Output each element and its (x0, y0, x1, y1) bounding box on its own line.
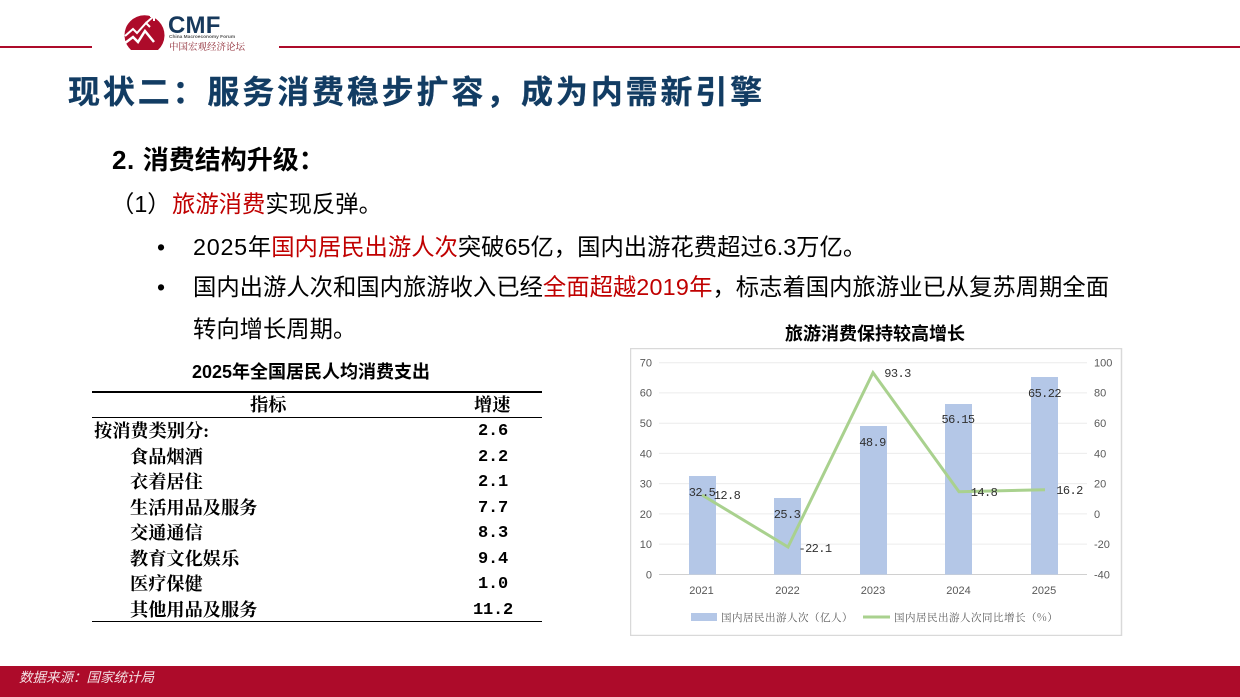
legend (691, 610, 1058, 625)
bullet 2: 国内出游人次和国内旅游收入已经全面超越2019年，标志着国内旅游业已从复苏周期全面 (193, 274, 1109, 300)
chart title: 旅游消费保持较高增长 (785, 324, 965, 344)
data labels: 12.8 (714, 489, 741, 503)
title: 现状二：服务消费稳步扩容，成为内需新引擎 (68, 74, 765, 110)
right axis labels: 20 (1094, 478, 1106, 490)
data labels: -22.1 (798, 542, 832, 556)
table: consumption spending: 衣着居住 (130, 472, 203, 492)
right axis labels: 80 (1094, 388, 1106, 400)
table: consumption spending (92, 391, 542, 622)
table: consumption spending: 食品烟酒 (130, 446, 203, 466)
legend: 国内居民出游人次同比增长（%） (894, 610, 1058, 625)
category labels: 2022 (775, 585, 800, 597)
data labels: 32.5 (689, 486, 716, 500)
subheading: 旅游消费实现反弹。 (172, 191, 382, 217)
subheading: （1） (111, 191, 171, 217)
category labels (689, 585, 1056, 597)
table: consumption spending: 指标 (250, 394, 286, 414)
data labels: 56.15 (941, 413, 975, 427)
table: consumption spending: 生活用品及服务 (130, 498, 257, 518)
table: consumption spending: 按消费类别分: (94, 421, 209, 441)
category labels: 2025 (1032, 585, 1056, 597)
footer bar (0, 666, 1240, 697)
table: consumption spending: 9.4 (478, 550, 508, 568)
source note: 数据来源：国家统计局 (19, 670, 154, 685)
right axis labels: -20 (1094, 539, 1110, 551)
header rule left (0, 46, 92, 48)
table: consumption spending: 2.6 (478, 422, 508, 441)
category labels: 2023 (861, 585, 885, 597)
data labels: 14.8 (971, 486, 998, 500)
right axis labels: 100 (1094, 358, 1112, 370)
right axis labels (1094, 358, 1112, 582)
category labels: 2021 (689, 585, 714, 597)
icon: red circle with rising arrow (124, 15, 164, 50)
right axis labels: -40 (1094, 570, 1110, 582)
left axis labels: 20 (640, 509, 652, 521)
left axis labels: 40 (640, 448, 652, 460)
logo wordmark: CMF (168, 12, 221, 39)
table: consumption spending: 医疗保健 (130, 574, 203, 594)
logo Chinese name: 中国宏观经济论坛 (169, 39, 245, 53)
data labels: 16.2 (1056, 484, 1083, 498)
category labels: 2024 (946, 585, 971, 597)
section heading: 2. 消费结构升级： (112, 145, 325, 175)
chart: tourism trips and growth (630, 348, 1122, 636)
data labels: 25.3 (774, 508, 801, 522)
left axis labels: 0 (646, 570, 652, 582)
bullet 1: 2025年国内居民出游人次突破65亿，国内出游花费超过6.3万亿。 (193, 234, 866, 260)
bullet 2: 转向增长周期。 (193, 316, 356, 342)
bullet 2: • (157, 274, 165, 300)
data labels: 93.3 (884, 367, 911, 381)
table: consumption spending: 11.2 (473, 600, 513, 620)
left axis labels: 60 (640, 388, 652, 400)
table: consumption spending: 交通通信 (130, 523, 203, 543)
table: consumption spending: 2.1 (478, 473, 508, 492)
table: consumption spending: 8.3 (478, 524, 508, 543)
header rule right (279, 46, 1240, 48)
right axis labels: 60 (1094, 418, 1106, 430)
logo English name: China Macroeconomy Forum (169, 35, 235, 40)
left axis labels (640, 358, 652, 582)
bullet 1: • (157, 234, 165, 260)
table: consumption spending: 7.7 (478, 498, 508, 518)
table: consumption spending: 2.2 (478, 448, 508, 466)
left axis labels: 70 (640, 358, 652, 370)
left axis labels: 10 (640, 539, 652, 551)
left axis labels: 30 (640, 478, 652, 490)
left axis labels: 50 (640, 418, 652, 430)
table: consumption spending: 增速 (474, 394, 510, 414)
right axis labels: 40 (1094, 448, 1106, 460)
line: year on year growth (702, 373, 1045, 547)
bars: domestic trips (689, 377, 1058, 574)
legend: 国内居民出游人次（亿人） (721, 610, 853, 625)
bullet 2 (157, 274, 1109, 342)
table title: 2025年全国居民人均消费支出 (192, 362, 430, 382)
data labels: 48.9 (859, 436, 886, 450)
data labels (689, 367, 1083, 556)
table: consumption spending: 1.0 (478, 575, 508, 594)
table: consumption spending: 其他用品及服务 (130, 600, 257, 620)
right axis labels: 0 (1094, 509, 1100, 521)
logo: CMF (124, 12, 245, 53)
table: consumption spending: 教育文化娱乐 (130, 548, 239, 568)
data labels: 65.22 (1028, 387, 1061, 401)
